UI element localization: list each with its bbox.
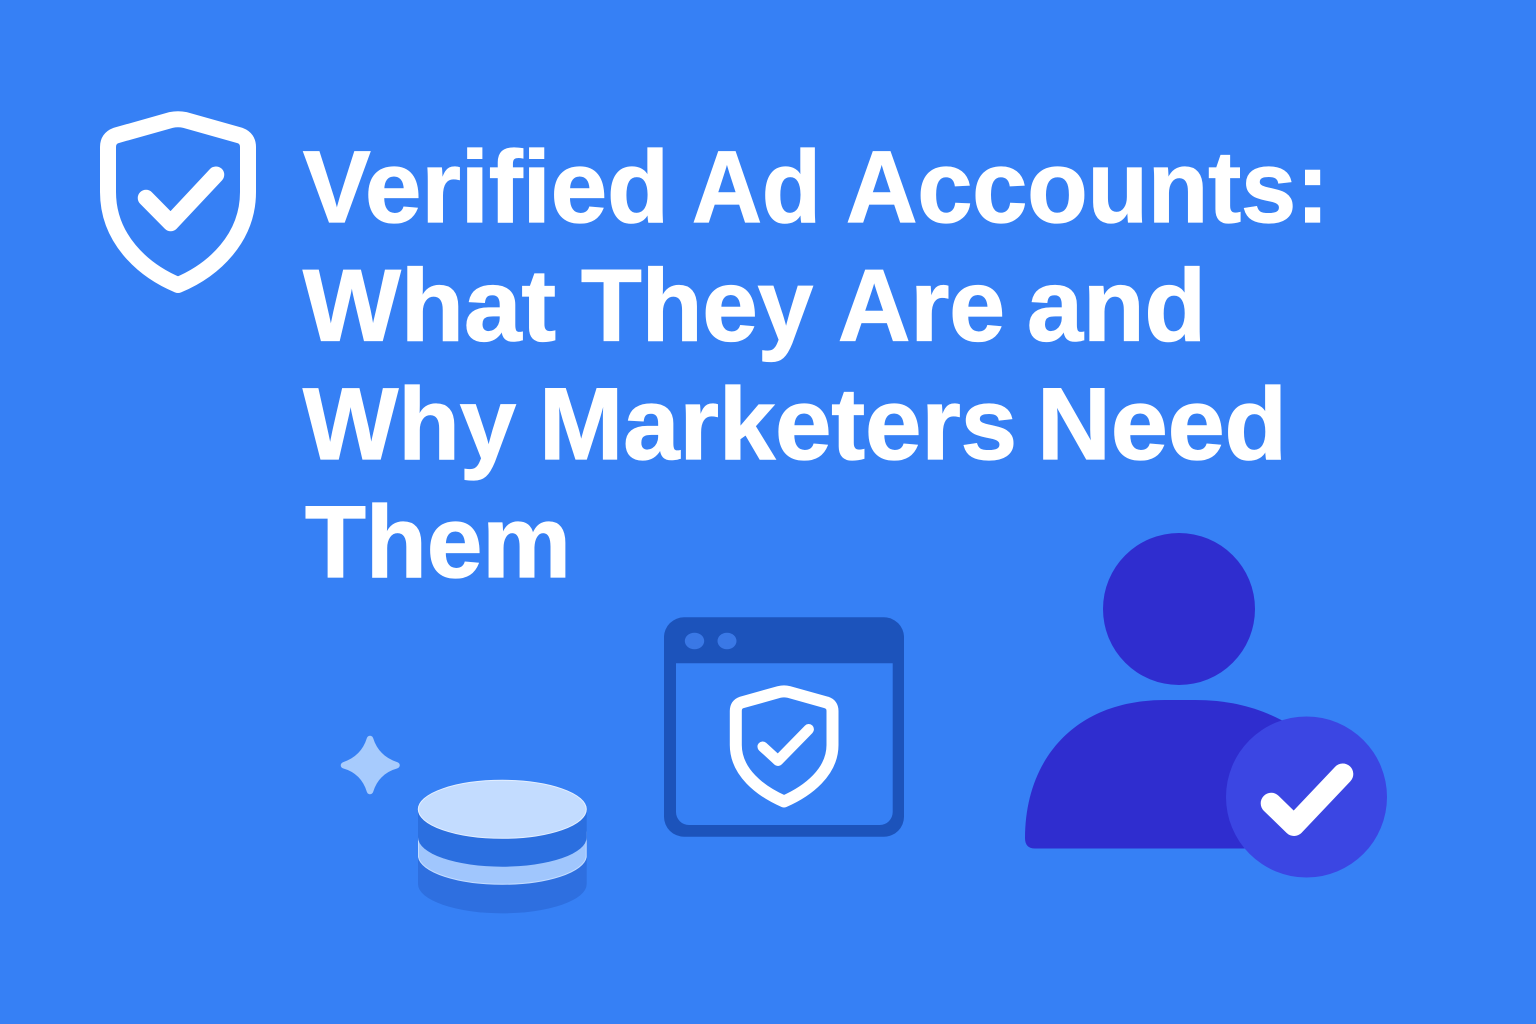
title: Are (838, 248, 1005, 362)
icon: verified user (1025, 533, 1387, 878)
icon: sparkle (344, 739, 396, 791)
title: Why (303, 367, 516, 481)
title (303, 130, 1329, 599)
verified badge (1226, 716, 1387, 878)
title: Ad (692, 130, 821, 244)
user head (1103, 533, 1255, 685)
title: and (1027, 248, 1206, 362)
title: Need (1037, 367, 1287, 481)
icon: large shield with check (108, 119, 248, 285)
small shield with check (736, 691, 832, 802)
title: Verified (303, 130, 669, 244)
title: Accounts: (846, 130, 1329, 244)
icon: browser window with shield (664, 617, 904, 837)
window buttons (685, 633, 736, 649)
title: Them (305, 485, 571, 599)
icon: coin stack (418, 780, 587, 913)
title: Marketers (539, 367, 1017, 481)
title: They (581, 248, 813, 362)
window frame (664, 617, 904, 837)
badge check (1271, 774, 1343, 826)
title: What (303, 248, 556, 362)
user body (1025, 700, 1310, 848)
